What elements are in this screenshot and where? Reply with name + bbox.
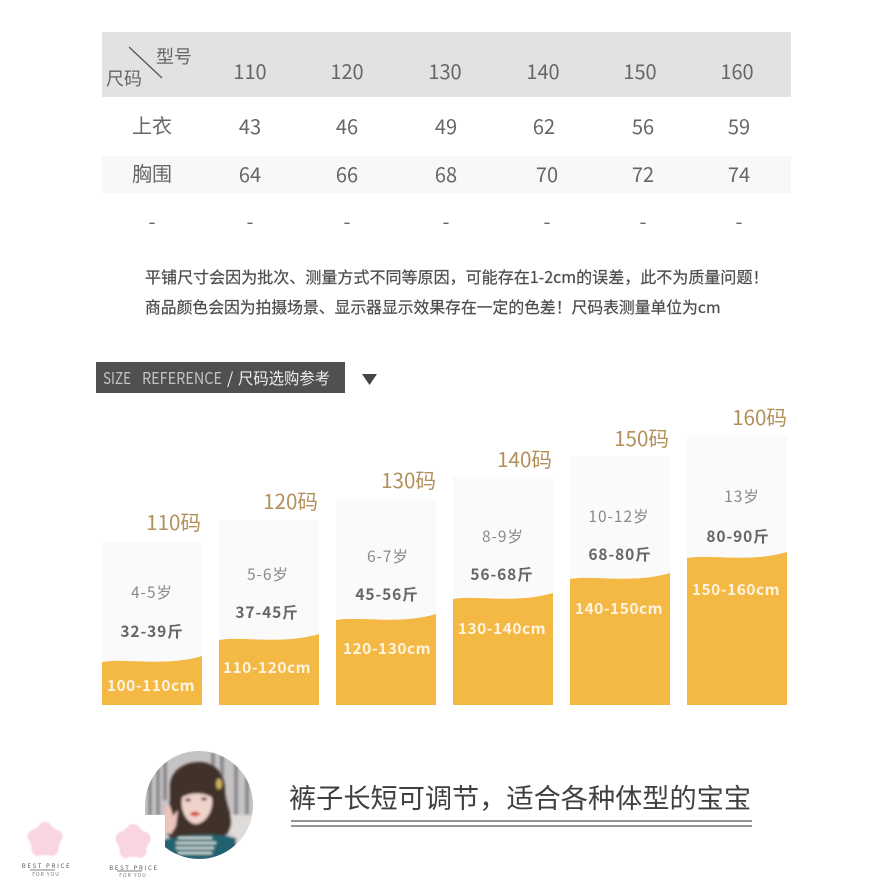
icon: down triangle bbox=[362, 374, 377, 385]
table header row: 型号 bbox=[156, 43, 192, 69]
table row: 上衣: 56 bbox=[632, 111, 654, 140]
table row: 胸围: 74 bbox=[728, 159, 750, 188]
size card 140: 140码 bbox=[497, 443, 552, 473]
watermark logo right: FOR YOU bbox=[119, 872, 147, 879]
size card 150: 68-80斤 bbox=[588, 543, 652, 565]
size card 160: 150-160cm bbox=[692, 578, 780, 600]
size card 130: 120-130cm bbox=[343, 637, 431, 659]
note text: 商品颜色会因为拍摄场景、显示器显示效果存在一定的色差！尺码表测量单位为cm bbox=[145, 295, 721, 318]
table row: 胸围: 64 bbox=[239, 159, 261, 188]
size card 110 bbox=[102, 506, 202, 705]
size card 140: 130-140cm bbox=[458, 617, 546, 639]
table row: empty: - bbox=[640, 206, 647, 235]
table header row bbox=[102, 32, 791, 97]
table row: 胸围: 66 bbox=[336, 159, 358, 188]
size card 110: 32-39斤 bbox=[120, 620, 184, 642]
table row: 胸围: 70 bbox=[536, 159, 558, 188]
table row: 上衣: 46 bbox=[336, 111, 358, 140]
watermark logo right: BEST PRICE bbox=[109, 863, 159, 872]
section heading bar: SIZE bbox=[103, 365, 131, 389]
note text bbox=[145, 264, 769, 318]
size card 150: 10-12岁 bbox=[588, 505, 650, 527]
table row: empty: - bbox=[149, 206, 156, 235]
table row: 上衣: 上衣 bbox=[132, 110, 172, 139]
table row: 上衣: 59 bbox=[728, 111, 750, 140]
portrait photo of child bbox=[145, 751, 254, 860]
table row: empty bbox=[149, 206, 743, 235]
size card 130: 130码 bbox=[381, 464, 436, 494]
table header row: 140 bbox=[526, 56, 560, 85]
slogan underline bbox=[291, 821, 752, 826]
table row: 上衣: 62 bbox=[533, 111, 555, 140]
table row: empty: - bbox=[736, 206, 743, 235]
table header row: 120 bbox=[330, 56, 364, 85]
size card 120 bbox=[219, 485, 319, 705]
table header row: 130 bbox=[428, 56, 462, 85]
watermark logo left bbox=[22, 822, 71, 878]
table header row: 160 bbox=[720, 56, 754, 85]
size card 130 bbox=[336, 464, 436, 705]
size card 150 bbox=[570, 422, 670, 705]
table header row: 150 bbox=[623, 56, 657, 85]
table row: 胸围: 胸围 bbox=[132, 158, 172, 187]
table row: empty: - bbox=[247, 206, 254, 235]
table row: 上衣 bbox=[132, 110, 750, 140]
section heading bar bbox=[96, 362, 345, 393]
size card 150: 140-150cm bbox=[575, 597, 663, 619]
size card 140 bbox=[453, 443, 553, 705]
section heading bar: REFERENCE bbox=[142, 365, 222, 389]
table header row: 尺码 bbox=[106, 65, 142, 91]
table row: empty: - bbox=[344, 206, 351, 235]
size card 140: 56-68斤 bbox=[470, 563, 534, 585]
size card 120: 5-6岁 bbox=[247, 563, 289, 585]
table row: empty: - bbox=[544, 206, 551, 235]
watermark logo right bbox=[109, 824, 159, 879]
table row: empty: - bbox=[443, 206, 450, 235]
size card 110: 100-110cm bbox=[107, 674, 195, 696]
table header row: 110 bbox=[233, 56, 267, 85]
size card 110: 4-5岁 bbox=[131, 581, 173, 603]
size table bbox=[102, 32, 791, 235]
note text: 平铺尺寸会因为批次、测量方式不同等原因，可能存在1-2cm的误差，此不为质量问题！ bbox=[145, 264, 769, 288]
table row: 上衣: 43 bbox=[239, 111, 261, 140]
size card 160: 80-90斤 bbox=[706, 525, 770, 547]
watermark logo left: BEST PRICE bbox=[22, 861, 71, 870]
section heading bar: / bbox=[227, 365, 234, 389]
size card 130: 6-7岁 bbox=[367, 545, 409, 567]
size card 160: 160码 bbox=[732, 401, 787, 431]
size card 160: 13岁 bbox=[724, 485, 760, 507]
size card 150: 150码 bbox=[614, 422, 669, 452]
size card 120: 120码 bbox=[263, 485, 318, 515]
table row: 胸围: 72 bbox=[632, 159, 654, 188]
slogan: 裤子长短可调节，适合各种体型的宝宝 bbox=[289, 777, 751, 816]
size card 110: 110码 bbox=[146, 506, 201, 536]
size card 140: 8-9岁 bbox=[482, 525, 524, 547]
table row: 上衣: 49 bbox=[435, 111, 457, 140]
watermark logo left: FOR YOU bbox=[32, 871, 60, 878]
size card 130: 45-56斤 bbox=[355, 583, 419, 605]
table row: 胸围 bbox=[102, 156, 791, 193]
table row: 胸围: 68 bbox=[435, 159, 457, 188]
size card 120: 37-45斤 bbox=[235, 601, 299, 623]
section heading bar: 尺码选购参考 bbox=[238, 365, 330, 389]
size card 120: 110-120cm bbox=[223, 656, 311, 678]
size card 160 bbox=[687, 401, 787, 705]
